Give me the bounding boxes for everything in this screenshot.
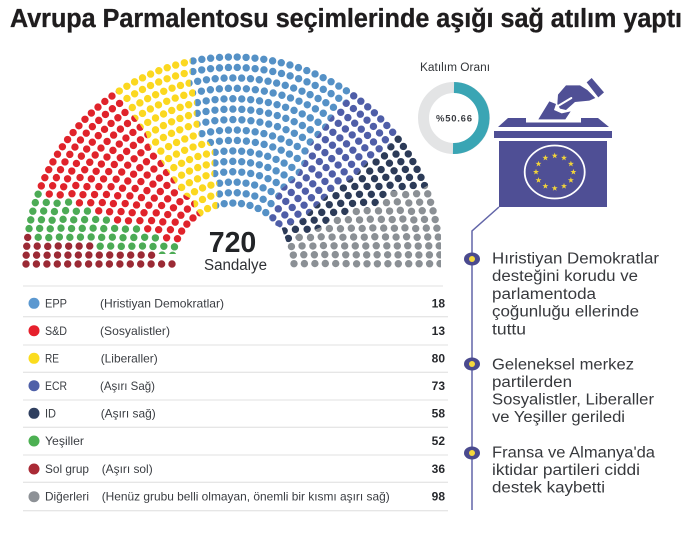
legend row: Yeşiller: Yeşiller: [45, 434, 84, 448]
key point 2: ve Yeşiller geriledi: [492, 409, 625, 426]
key point 3: iktidar partileri ciddi: [492, 462, 640, 479]
legend row: RE: (Liberaller): [101, 352, 158, 366]
legend row: RE: [28, 352, 445, 366]
title: Avrupa Parmalentosu seçimlerinde aşığı sağ atılım yaptı: [10, 5, 682, 33]
seats: Diğerleri: [288, 185, 441, 268]
legend row: ID: ID: [45, 406, 56, 420]
icon: ballot box with EU flag: [494, 78, 612, 207]
key point 1: parlamentoda: [492, 286, 596, 303]
key point 1: Hıristiyan Demokratlar: [492, 250, 659, 267]
total seat count: 720: [209, 227, 256, 259]
key point 2: [464, 356, 654, 426]
legend row: S&D: (Sosyalistler): [100, 324, 170, 338]
legend row: Diğerleri: [28, 490, 445, 504]
legend row: Sol grup: (Aşırı sol): [102, 462, 153, 476]
seats: Yeşiller: [25, 190, 179, 254]
legend row: ECR: (Aşırı Sağ): [100, 379, 155, 393]
legend row: Diğerleri: 98: [432, 490, 445, 504]
legend row: ECR: [28, 379, 445, 393]
legend row: S&D: [28, 324, 445, 338]
key point 1: tuttu: [492, 321, 526, 338]
legend row: ECR: ECR: [45, 379, 67, 393]
total seat count: [204, 227, 267, 274]
legend row: ID: 58: [432, 406, 445, 420]
key point 2: partilerden: [492, 374, 572, 391]
legend row: Diğerleri: (Henüz grubu belli olmayan, önemli bir kısmı aşırı sağ): [102, 490, 390, 504]
legend row: S&D: 13: [432, 324, 445, 338]
key point 2: Geleneksel merkez: [492, 356, 634, 373]
legend row: S&D: S&D: [45, 324, 67, 338]
key point 3: [464, 444, 655, 496]
legend row: EPP: 18: [432, 296, 445, 310]
legend row: Yeşiller: [28, 434, 445, 448]
legend row: Sol grup: Sol grup: [45, 462, 89, 476]
legend row: ID: (Aşırı sağ): [101, 406, 156, 420]
turnout value: %50.66: [436, 114, 472, 124]
legend row: RE: RE: [45, 352, 59, 366]
legend row: RE: 80: [432, 352, 445, 366]
key point 3: Fransa ve Almanya'da: [492, 444, 655, 461]
key point 1: çoğunluğu ellerinde: [492, 304, 639, 321]
legend row: Diğerleri: Diğerleri: [45, 490, 89, 504]
legend row: Sol grup: [28, 462, 445, 476]
legend row: EPP: EPP: [45, 296, 67, 310]
key point 1: [464, 250, 659, 338]
turnout donut: [420, 62, 490, 149]
legend row: EPP: (Hristiyan Demokratlar): [100, 296, 224, 310]
key point 2: Sosyalistler, Liberaller: [492, 391, 654, 408]
hemicycle seat chart: [26, 57, 440, 264]
seats: RE: [116, 58, 218, 216]
seats: Sol grup: [22, 234, 176, 268]
total seat count: Sandalye: [204, 257, 267, 274]
legend table: [23, 286, 448, 511]
legend row: Yeşiller: 52: [432, 434, 445, 448]
seats: ECR: [269, 92, 396, 228]
legend row: EPP: [28, 296, 445, 310]
key point 3: destek kaybetti: [492, 479, 605, 496]
seats: EPP: [190, 53, 350, 221]
connector line from ballot box: [472, 207, 499, 510]
legend row: Sol grup: 36: [432, 462, 445, 476]
seats: S&D: [38, 90, 201, 242]
legend row: ECR: 73: [432, 379, 445, 393]
key point 1: desteğini korudu ve: [492, 268, 638, 285]
turnout heading: Katılım Oranı: [420, 62, 490, 74]
legend row: ID: [28, 406, 445, 420]
seats: ID: [282, 136, 428, 243]
